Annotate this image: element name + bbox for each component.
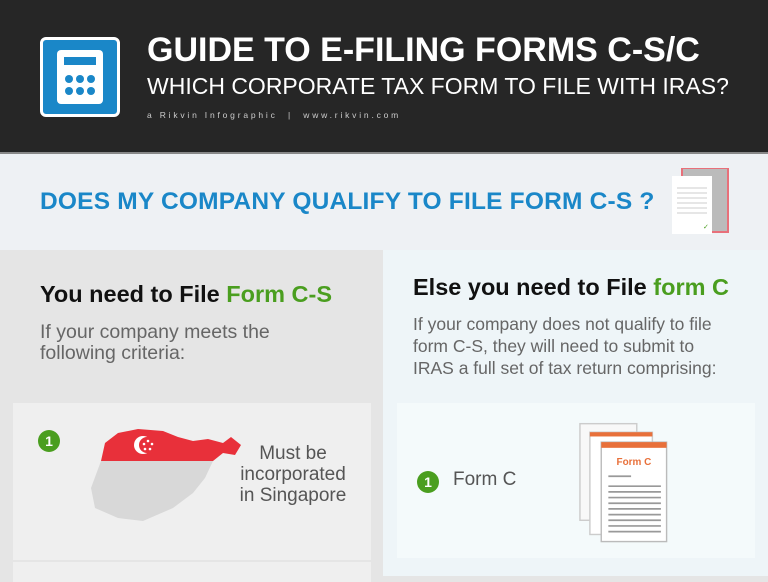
card: Form C item: 1 [424,474,432,490]
text: form C intro: IRAS a full set of tax return comprising: [413,358,716,378]
text: criterion 1: in Singapore [240,485,346,506]
text: form C intro [413,314,716,378]
header [0,0,768,152]
text: criteria intro [40,321,270,364]
icon: form C documents [579,423,668,542]
card: Form C item [397,403,755,558]
tagline: a Rikvin Infographic | www.rikvin.com [147,110,401,120]
icon: document [672,168,729,234]
question band [0,152,768,252]
title: GUIDE TO E-FILING FORMS C-S/C [147,31,700,69]
text: criteria intro: following criteria: [40,342,185,364]
panel: right Form C [383,250,768,576]
text: criterion 1: incorporated [240,464,346,485]
text: form C intro: form C-S, they will need to submit to [413,336,694,356]
heading: question: DOES MY COMPANY QUALIFY TO FILE FORM C-S ? [40,188,655,215]
icon: document: ✓ [703,224,709,231]
text: criteria intro: If your company meets the [40,321,270,343]
icon: singapore map [91,429,241,521]
heading: Form C: Else you need to File form C [413,274,729,300]
panel: left Form C-S [0,250,383,576]
card: criterion 1: 1 [45,433,53,449]
icon: calculator [40,37,120,117]
card: criterion 1 [13,403,371,560]
subtitle: WHICH CORPORATE TAX FORM TO FILE WITH IRAS? [147,73,729,99]
text: form C intro: If your company does not qualify to file [413,314,712,334]
text: criterion 1: Must be [259,443,327,464]
icon: form C documents: Form C [617,457,651,468]
text: criterion 1 [240,443,346,506]
card: Form C item: Form C [453,469,516,490]
heading: Form C-S: You need to File Form C-S [40,281,332,307]
